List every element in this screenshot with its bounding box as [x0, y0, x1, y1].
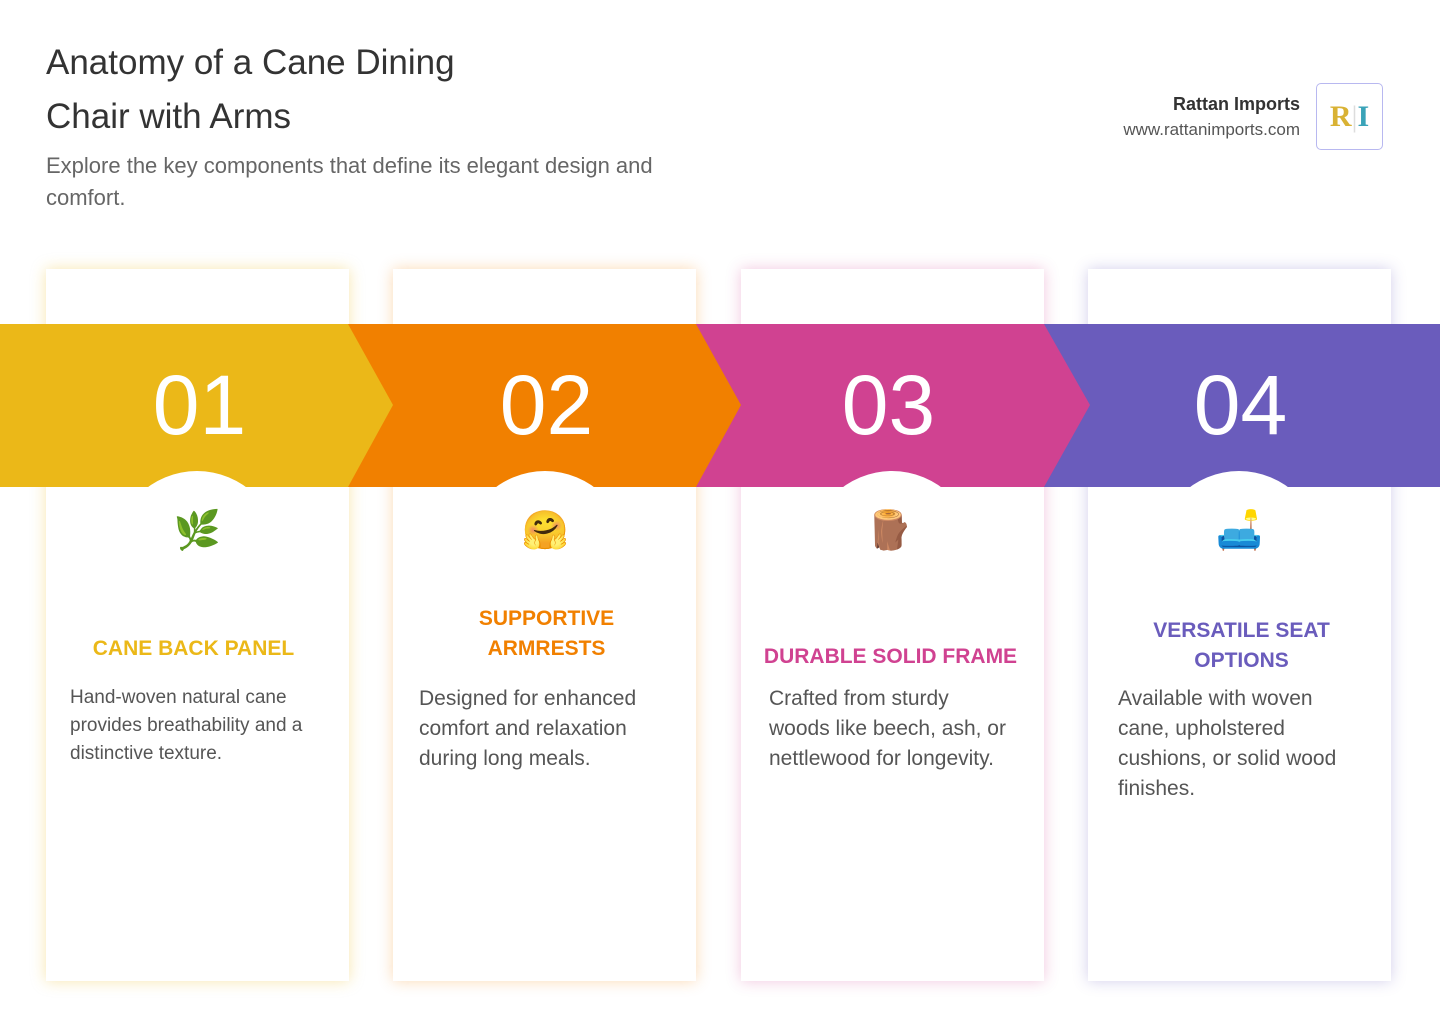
- brand: Rattan Imports: [1173, 94, 1300, 114]
- text 3: Crafted from sturdy: [769, 687, 949, 710]
- text 2: Designed for enhanced comfort and relaxation during long meals.: [419, 687, 636, 770]
- card 1: [46, 269, 349, 981]
- text 1: Hand-woven natural cane provides breathability and a distinctive texture.: [70, 687, 302, 764]
- circle 2: [462, 471, 628, 637]
- heading 1: CANE BACK PANEL: [93, 637, 294, 660]
- card 3: [741, 269, 1044, 981]
- heading 2: ARMRESTS: [488, 637, 605, 660]
- text 3: woods like beech, ash, or: [769, 717, 1006, 740]
- logo: [1316, 83, 1383, 150]
- text 3: nettlewood for longevity.: [769, 747, 994, 770]
- heading 4: VERSATILE SEAT: [1153, 619, 1330, 642]
- heading 3: DURABLE SOLID FRAME: [764, 645, 1017, 668]
- heading 2: [479, 607, 614, 660]
- number 03: 03: [842, 358, 935, 452]
- icon: hug: 🤗: [522, 510, 569, 552]
- heading 4: OPTIONS: [1194, 649, 1289, 672]
- icon: couch: 🛋️: [1216, 510, 1263, 552]
- subtitle: Explore the key components that define its elegant design and comfort.: [46, 153, 653, 210]
- icon: wood: 🪵: [866, 510, 913, 552]
- circle 4: [1156, 471, 1322, 637]
- number 02: 02: [500, 358, 593, 452]
- heading 4: [1153, 619, 1330, 672]
- heading 2: SUPPORTIVE: [479, 607, 614, 630]
- card 2: [393, 269, 696, 981]
- circle 1: [114, 471, 280, 637]
- brand: [1123, 94, 1300, 139]
- icon: leaf: 🌿: [174, 510, 221, 552]
- logo: R|I: [1330, 100, 1369, 133]
- title: [46, 43, 455, 136]
- number 01: 01: [153, 358, 246, 452]
- number 04: 04: [1194, 358, 1287, 452]
- brand: www.rattanimports.com: [1123, 120, 1300, 139]
- circle 3: [809, 471, 975, 637]
- text 3: [769, 687, 1006, 770]
- card 4: [1088, 269, 1391, 981]
- text 4: Available with woven cane, upholstered cushions, or solid wood finishes.: [1118, 687, 1336, 800]
- arrow band: [0, 324, 1440, 487]
- title: Chair with Arms: [46, 97, 291, 136]
- title: Anatomy of a Cane Dining: [46, 43, 455, 82]
